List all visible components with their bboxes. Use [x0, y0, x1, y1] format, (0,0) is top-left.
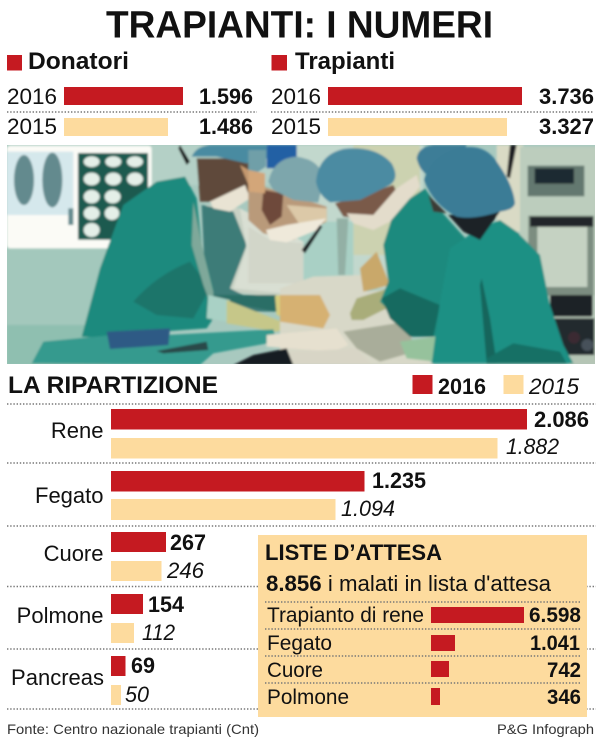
chart row: rene: Rene [51, 418, 104, 443]
chart row: fegato: Fegato [35, 483, 104, 508]
chart row: cuore: 267 [170, 530, 206, 555]
chart row: pancreas: Pancreas [11, 665, 104, 690]
row: fegato [267, 632, 580, 655]
bar: trapianti 2015 [328, 118, 507, 136]
label: donatori 2016: 2016 [7, 84, 57, 109]
value: trapianti 2015: 3.327 [539, 114, 594, 139]
row: trapianto di rene [267, 604, 581, 627]
row: cuore: Cuore [267, 659, 323, 682]
label: donatori 2015: 2015 [7, 114, 57, 139]
row: polmone: 346 [547, 686, 581, 709]
chart row: rene: 2.086 [534, 407, 589, 432]
panel: liste d'attesa [258, 535, 587, 717]
row: cuore: 742 [547, 659, 581, 682]
heading: la ripartizione: LA RIPARTIZIONE [8, 372, 218, 399]
bar: donatori 2015 [64, 118, 168, 136]
chart row: fegato: 1.094 [341, 496, 395, 521]
row: trapianto di rene: 6.598 [529, 604, 581, 627]
text: total patients on the waiting list: 8.856 i malati in lista d'attesa [266, 571, 552, 596]
legend: 2016 [438, 374, 486, 399]
label: trapianti 2015: 2015 [271, 114, 321, 139]
heading: trapianti: Trapianti [295, 48, 395, 75]
chart row: pancreas: 50 [125, 682, 150, 707]
label: trapianti 2016: 2016 [271, 84, 321, 109]
heading: liste d'attesa: LISTE D’ATTESA [265, 540, 442, 565]
chart row: fegato [35, 468, 426, 521]
chart row: polmone [17, 592, 185, 645]
row: polmone [267, 686, 581, 709]
chart row: cuore [44, 530, 206, 583]
value: trapianti 2016: 3.736 [539, 84, 594, 109]
chart row: polmone: 154 [148, 592, 185, 617]
photo: surgeons in the operating room [0, 140, 600, 370]
heading: donatori: Donatori [28, 48, 129, 75]
chart row: fegato: 1.235 [372, 468, 426, 493]
chart row: pancreas: 69 [131, 653, 155, 678]
row: fegato: Fegato [267, 632, 332, 655]
panel: donatori [7, 48, 257, 139]
chart row: polmone: Polmone [17, 603, 104, 628]
bar: donatori 2016 [64, 87, 183, 105]
row: trapianto di rene: Trapianto di rene [267, 604, 424, 627]
chart row: cuore: 246 [166, 558, 205, 583]
legend: 2015 [528, 374, 580, 399]
row: fegato: 1.041 [530, 632, 580, 655]
chart row: rene [51, 407, 589, 459]
credit: P&G Infograph [497, 721, 594, 737]
panel: trapianti [271, 48, 594, 139]
icon: donatori red square [7, 55, 22, 70]
legend [412, 374, 580, 399]
chart row: pancreas [11, 653, 155, 707]
chart row: rene: 1.882 [506, 434, 559, 459]
chart row: polmone: 112 [142, 620, 175, 645]
bar: trapianti 2016 [328, 87, 522, 105]
row: polmone: Polmone [267, 686, 349, 709]
title: TRAPIANTI: I NUMERI [106, 4, 493, 46]
row: cuore [267, 659, 581, 682]
value: donatori 2015: 1.486 [199, 114, 253, 139]
source note: Fonte: Centro nazionale trapianti (Cnt) [7, 721, 259, 737]
value: donatori 2016: 1.596 [199, 84, 253, 109]
chart row: cuore: Cuore [44, 541, 104, 566]
icon: trapianti red square [272, 55, 287, 70]
